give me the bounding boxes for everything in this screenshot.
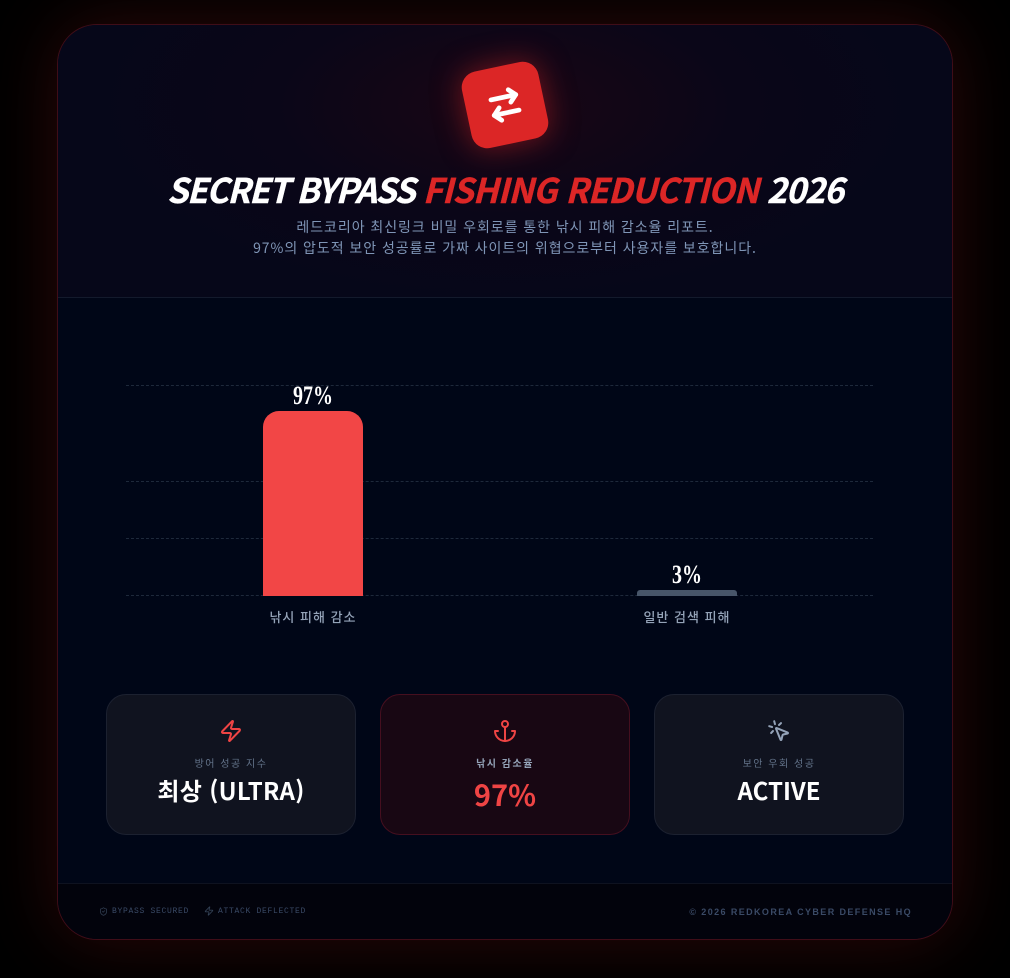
value label 97%: 97% xyxy=(293,381,333,411)
axis label: phishing reduction: 낚시 피해 감소 xyxy=(269,607,357,626)
panel: phishing reduction stat xyxy=(380,694,630,835)
panel: defense index stat xyxy=(106,694,356,835)
value: ACTIVE xyxy=(738,772,820,807)
footer copyright: © 2026 REDKOREA CYBER DEFENSE HQ xyxy=(689,907,912,917)
subtitle text xyxy=(253,217,757,258)
footer status: attack deflected: ATTACK DEFLECTED xyxy=(218,907,306,916)
value: 최상 (ULTRA) xyxy=(157,772,305,807)
axis label: general search damage: 일반 검색 피해 xyxy=(643,607,731,626)
bar: phishing reduction 97% xyxy=(263,411,363,596)
subtitle text: 97%의 압도적 보안 성공률로 가짜 사이트의 위협으로부터 사용자를 보호합니다. xyxy=(253,238,757,258)
value label 3%: 3% xyxy=(672,560,702,590)
subtitle text: 레드코리아 최신링크 비밀 우회로를 통한 낚시 피해 감소율 리포트. xyxy=(296,217,714,237)
panel: header background xyxy=(58,25,952,298)
panel: security bypass stat xyxy=(654,694,904,835)
label: 보안 우회 성공 xyxy=(743,755,815,770)
panel: footer background xyxy=(58,883,952,940)
icon: anchor xyxy=(494,720,516,742)
bar: general search damage 3% xyxy=(637,590,737,596)
icon: lightning xyxy=(220,720,241,742)
footer status: bypass secured: BYPASS SECURED xyxy=(112,907,189,916)
icon: mouse pointer click xyxy=(768,720,789,741)
label: 낚시 감소율 xyxy=(476,755,534,770)
title: SECRET BYPASS FISHING REDUCTION 2026 xyxy=(167,164,843,213)
value: 97% xyxy=(474,773,536,815)
label: 방어 성공 지수 xyxy=(195,755,267,770)
icon: exchange arrows badge xyxy=(459,59,551,151)
bar chart xyxy=(126,381,873,626)
